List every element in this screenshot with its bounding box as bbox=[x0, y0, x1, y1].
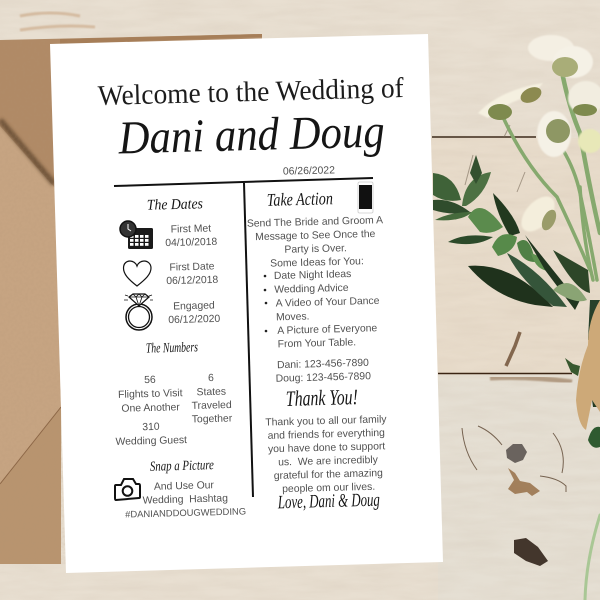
heading: Snap a Picture: Snap a Picture bbox=[150, 458, 214, 475]
date: 06/26/2022 bbox=[283, 165, 335, 178]
stat: states: States bbox=[196, 387, 226, 398]
text: message: Message to See Once the bbox=[255, 229, 376, 243]
envelope bbox=[0, 34, 262, 564]
list: ideas: From Your Table. bbox=[278, 337, 356, 350]
list: ideas: Wedding Advice bbox=[274, 283, 349, 296]
text: first met: 04/10/2018 bbox=[165, 237, 218, 249]
panel: take action bbox=[247, 182, 384, 385]
text: phone numbers: Dani: 123-456-7890 bbox=[277, 358, 369, 371]
card bbox=[50, 34, 443, 573]
list: ideas: Moves. bbox=[276, 311, 310, 323]
stat: flights: Flights to Visit bbox=[118, 388, 183, 401]
text: hashtag: Wedding Hashtag bbox=[143, 493, 228, 507]
stat: states: Traveled bbox=[191, 400, 232, 412]
text: engaged: Engaged bbox=[173, 300, 215, 313]
stat: guests: Wedding Guest bbox=[115, 435, 187, 448]
title: Welcome to the Wedding of bbox=[97, 73, 405, 112]
stems bbox=[503, 77, 600, 600]
heading: The Numbers: The Numbers bbox=[146, 340, 198, 357]
stat: states: Together bbox=[192, 413, 233, 426]
text: first date: First Date bbox=[169, 261, 215, 274]
panel: numbers bbox=[115, 372, 233, 448]
names: Dani and Doug bbox=[117, 106, 385, 165]
leaves bbox=[433, 155, 600, 448]
icon: ring bbox=[124, 294, 153, 330]
text: message: Some Ideas for You: bbox=[270, 256, 364, 270]
heading: The Dates: The Dates bbox=[147, 196, 203, 214]
signature: Love, Dani & Doug bbox=[277, 490, 380, 513]
text: hashtag: #DANIANDDOUGWEDDING bbox=[125, 505, 246, 520]
text: hashtag: And Use Our bbox=[154, 480, 215, 493]
panel: dates bbox=[120, 196, 221, 357]
list: ideas: A Video of Your Dance bbox=[276, 296, 380, 310]
text: message: and friends for everything bbox=[268, 428, 385, 442]
list: ideas bbox=[264, 268, 381, 350]
text: message: grateful for the amazing bbox=[274, 468, 383, 482]
text: message: Send The Bride and Groom A bbox=[247, 215, 383, 230]
text: message: you have done to support bbox=[268, 441, 386, 455]
text: first date: 06/12/2018 bbox=[166, 275, 219, 287]
stat: flights: 56 bbox=[144, 375, 156, 386]
text: message: us. We are incredibly bbox=[278, 455, 379, 468]
text: message: Party is Over. bbox=[284, 243, 347, 256]
icon: heart bbox=[124, 261, 151, 286]
icon: phone bbox=[358, 182, 373, 213]
text: first met: First Met bbox=[171, 223, 211, 236]
icon: clock and calendar bbox=[120, 221, 153, 249]
stat: guests: 310 bbox=[142, 422, 160, 433]
list: ideas: A Picture of Everyone bbox=[277, 323, 378, 337]
panel: thank you bbox=[265, 384, 389, 513]
list: ideas: Date Night Ideas bbox=[274, 269, 351, 282]
text: message: Thank you to all our family bbox=[265, 414, 387, 429]
heading: Thank You: Thank You! bbox=[285, 384, 358, 411]
stat: flights: One Another bbox=[121, 402, 181, 415]
text: phone numbers: Doug: 123-456-7890 bbox=[275, 371, 371, 385]
table rules bbox=[114, 178, 373, 497]
panel: snap a picture bbox=[115, 458, 246, 520]
stat: states: 6 bbox=[208, 373, 214, 384]
blossoms bbox=[478, 35, 600, 238]
twine bbox=[576, 300, 600, 430]
heading: Take Action: Take Action bbox=[267, 188, 333, 210]
flowers and greenery bbox=[433, 35, 600, 600]
text: message: people om our lives. bbox=[282, 482, 375, 495]
icon: camera bbox=[115, 479, 140, 500]
text: engaged: 06/12/2020 bbox=[168, 314, 221, 326]
